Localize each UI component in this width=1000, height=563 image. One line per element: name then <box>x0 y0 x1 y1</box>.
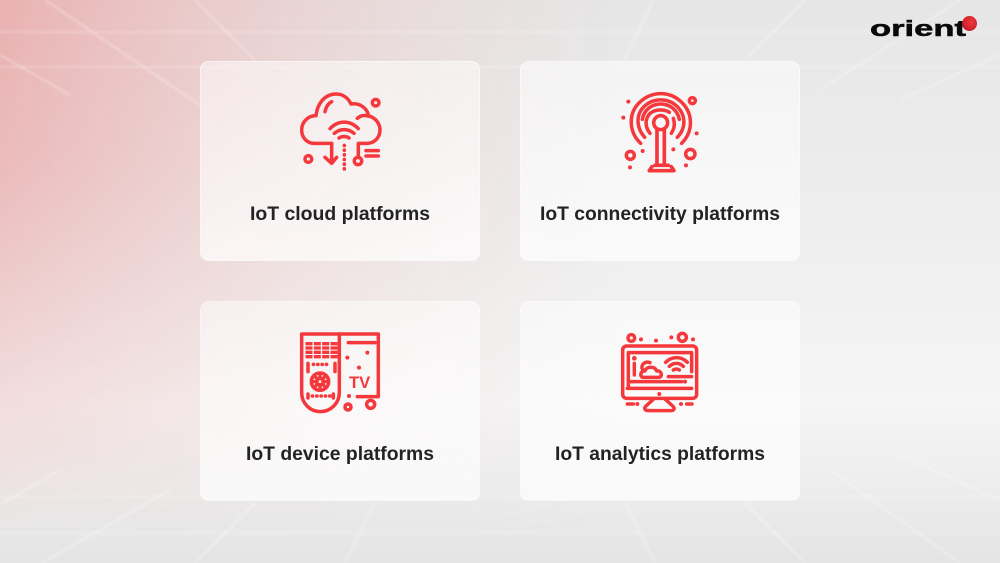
panel: IoT cloud platforms <box>200 62 480 260</box>
label: IoT analytics platforms <box>555 443 765 465</box>
icon: cloud with wifi <box>302 94 380 171</box>
label: IoT connectivity platforms <box>540 203 780 225</box>
panel: IoT analytics platforms <box>520 302 800 500</box>
panel: IoT connectivity platforms <box>520 62 800 260</box>
label: IoT cloud platforms <box>250 203 430 225</box>
logo: orient <box>870 16 977 41</box>
icon: monitor with weather <box>623 333 697 411</box>
label: IoT device platforms <box>246 443 434 465</box>
panel: IoT device platforms <box>200 302 480 500</box>
logo: orient: orient <box>870 16 967 41</box>
TV lettering: TV <box>349 373 370 392</box>
icon: remote and TV <box>302 334 378 412</box>
icon: antenna tower <box>621 94 699 171</box>
